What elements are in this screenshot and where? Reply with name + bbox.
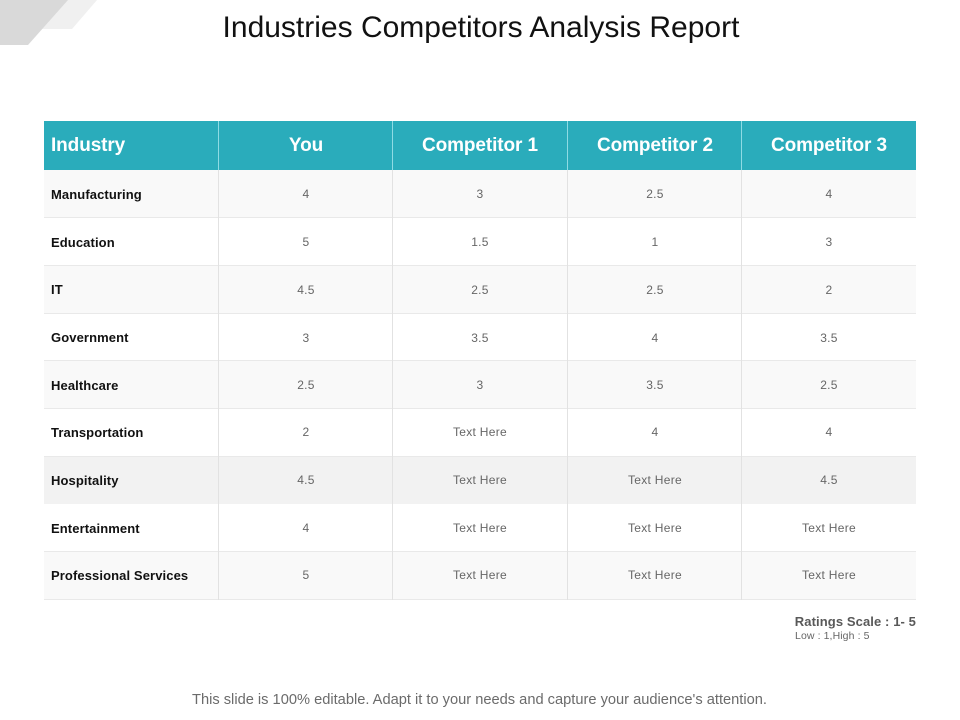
row: Hospitality: Text Here [453, 473, 507, 487]
row: Education: 5 [302, 235, 309, 249]
row: IT: 2.5 [646, 283, 664, 297]
row: Healthcare: 3 [476, 378, 483, 392]
row: Entertainment: Text Here [453, 521, 507, 535]
row: Education: Education [51, 235, 115, 250]
row: Transportation: 4 [652, 425, 658, 439]
header: You: You [289, 135, 323, 156]
row: Manufacturing: 4 [826, 187, 832, 201]
row: Manufacturing [44, 170, 916, 218]
row: Healthcare: 2.5 [297, 378, 315, 392]
header: Competitor 3: Competitor 3 [771, 135, 887, 156]
row: IT: 4.5 [297, 283, 315, 297]
header: Industry: Industry [51, 135, 125, 156]
row: Transportation: Text Here [453, 425, 507, 439]
header: Competitor 2: Competitor 2 [597, 135, 713, 156]
row: Professional Services: Professional Services [51, 568, 188, 583]
row: Education [44, 218, 916, 266]
header: Competitor 1: Competitor 1 [422, 135, 538, 156]
decorative corner shapes [0, 0, 97, 45]
row: Hospitality: Hospitality [51, 473, 119, 488]
row: Manufacturing: Manufacturing [51, 187, 142, 202]
row: Hospitality [44, 457, 916, 504]
ratings scale heading: Ratings Scale : 1- 5 [795, 614, 916, 629]
row: Education: 3 [826, 235, 832, 249]
row: Manufacturing: 4 [302, 187, 309, 201]
row: Professional Services: Text Here [628, 568, 682, 582]
footer text: This slide is 100% editable. Adapt it to your needs and capture your audience's attention. [192, 692, 767, 708]
row: Entertainment: Entertainment [51, 521, 140, 536]
row: Transportation: 2 [302, 425, 309, 439]
row: Hospitality: 4.5 [297, 473, 315, 487]
row: IT: 2.5 [471, 283, 489, 297]
row: Entertainment: 4 [302, 521, 309, 535]
row: Hospitality: Text Here [628, 473, 682, 487]
row: Professional Services: Text Here [802, 568, 856, 582]
row: Professional Services: 5 [302, 568, 309, 582]
row: Government: Government [51, 330, 129, 345]
row: Professional Services: Text Here [453, 568, 507, 582]
row: Government: 3.5 [471, 331, 489, 345]
row: IT [44, 266, 916, 314]
row: Healthcare: Healthcare [51, 378, 118, 393]
row: IT: 2 [826, 283, 832, 297]
row: Transportation: 4 [826, 425, 832, 439]
row: Manufacturing: 2.5 [646, 187, 664, 201]
row: Education: 1.5 [471, 235, 489, 249]
title: Industries Competitors Analysis Report [223, 11, 739, 44]
row: Government: 3.5 [820, 331, 838, 345]
row: Transportation [44, 409, 916, 457]
row: IT: IT [51, 282, 63, 297]
row: Education: 1 [652, 235, 658, 249]
row: Manufacturing: 3 [476, 187, 483, 201]
row: Entertainment [44, 504, 916, 552]
row: Government: 3 [302, 331, 309, 345]
row: Healthcare: 3.5 [646, 378, 664, 392]
ratings legend: Low : 1,High : 5 [795, 630, 870, 642]
row: Government [44, 314, 916, 361]
row: Healthcare: 2.5 [820, 378, 838, 392]
row: Healthcare [44, 361, 916, 409]
row: Entertainment: Text Here [802, 521, 856, 535]
row: Professional Services [44, 552, 916, 600]
row: Entertainment: Text Here [628, 521, 682, 535]
row: Transportation: Transportation [51, 425, 143, 440]
row: Government: 4 [652, 331, 658, 345]
row: Hospitality: 4.5 [820, 473, 838, 487]
table header [44, 121, 916, 170]
